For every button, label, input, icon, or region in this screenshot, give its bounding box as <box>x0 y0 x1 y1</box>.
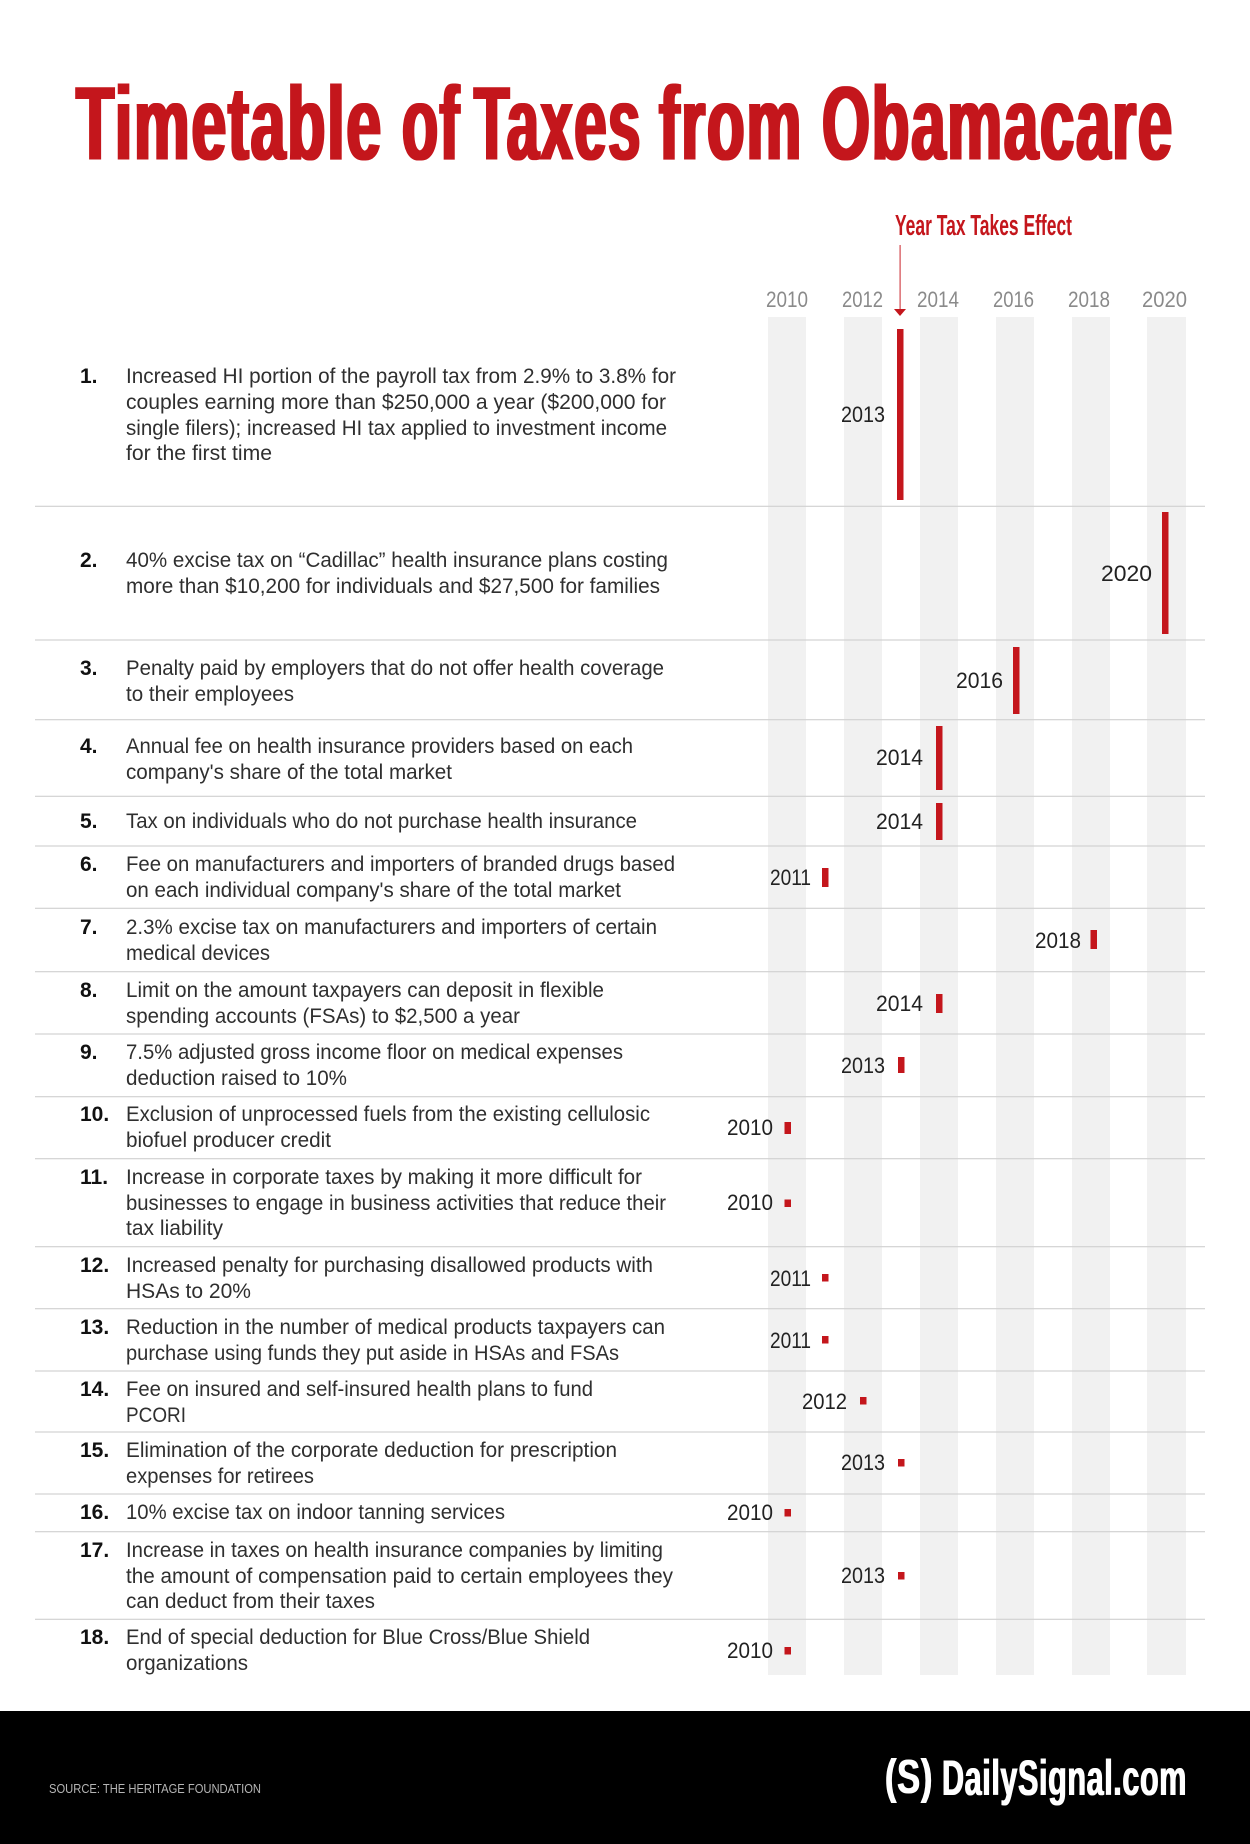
row 10: biofuel producer credit <box>126 1129 331 1152</box>
title <box>76 66 1174 182</box>
row 13: 2011 <box>770 1328 811 1353</box>
row 1: 2013 <box>841 402 885 427</box>
row 1 <box>80 329 904 500</box>
row 17: can deduct from their taxes <box>126 1590 375 1613</box>
row 11: tax liability <box>126 1217 223 1240</box>
row 17: 2013 <box>841 1563 885 1588</box>
row 16: 16. <box>80 1501 109 1524</box>
row 8 <box>80 979 942 1028</box>
title: of <box>402 66 461 182</box>
row 2: 2020 <box>1101 561 1152 586</box>
row 4 <box>80 726 942 790</box>
year axis labels <box>766 287 1187 312</box>
year axis labels: 2020 <box>1142 287 1187 312</box>
row 11: 2010 <box>727 1190 773 1215</box>
row 7: 2018 <box>1035 928 1081 953</box>
year axis labels: 2010 <box>766 287 808 312</box>
row 11: Increase in corporate taxes by making it more difficult for <box>126 1166 642 1189</box>
year axis labels: 2016 <box>993 287 1034 312</box>
row 12: HSAs to 20% <box>126 1280 251 1303</box>
row 18: End of special deduction for Blue Cross/Blue Shield <box>126 1626 590 1649</box>
row 12: 2011 <box>770 1266 811 1291</box>
row 10 <box>80 1103 791 1152</box>
row 14: 2012 <box>802 1389 847 1414</box>
row 8: 8. <box>80 979 98 1002</box>
row 3: 3. <box>80 657 98 680</box>
row 13 <box>80 1316 828 1365</box>
row 3: 2016 <box>956 668 1003 693</box>
row 9: deduction raised to 10% <box>126 1067 347 1090</box>
row 3: Penalty paid by employers that do not offer health coverage <box>126 657 664 680</box>
title: from <box>659 66 803 182</box>
footer <box>0 1711 1250 1844</box>
year axis labels: 2014 <box>917 287 959 312</box>
row 11 <box>80 1166 791 1240</box>
row 11: businesses to engage in business activities that reduce their <box>126 1192 666 1215</box>
source: SOURCE: THE HERITAGE FOUNDATION <box>49 1781 261 1796</box>
row 6: 2011 <box>770 865 811 890</box>
row 1: couples earning more than $250,000 a year ($200,000 for <box>126 391 666 414</box>
row 6: 6. <box>80 853 98 876</box>
row 18: organizations <box>126 1652 248 1675</box>
row 11: 11. <box>80 1166 108 1189</box>
row 1: Increased HI portion of the payroll tax from 2.9% to 3.8% for <box>126 365 676 388</box>
row 14: PCORI <box>126 1404 186 1427</box>
row 17: the amount of compensation paid to certain employees they <box>126 1565 673 1588</box>
row 9: 2013 <box>841 1053 885 1078</box>
row 8: Limit on the amount taxpayers can deposit in flexible <box>126 979 604 1002</box>
row 4: Annual fee on health insurance providers based on each <box>126 735 633 758</box>
row 4: company's share of the total market <box>126 761 452 784</box>
row 4: 2014 <box>876 745 923 770</box>
row 17 <box>80 1539 904 1613</box>
row 14: Fee on insured and self-insured health plans to fund <box>126 1378 593 1401</box>
row 4: 4. <box>80 735 98 758</box>
year axis labels: 2012 <box>842 287 883 312</box>
logo <box>885 1750 1187 1806</box>
row 1: 1. <box>80 365 98 388</box>
row 2: more than $10,200 for individuals and $27,500 for families <box>126 575 660 598</box>
row 16 <box>80 1500 791 1525</box>
row 8: 2014 <box>876 991 923 1016</box>
row 5: 2014 <box>876 809 923 834</box>
row 9: 9. <box>80 1041 98 1064</box>
logo: (S) <box>885 1751 933 1804</box>
row 6: Fee on manufacturers and importers of branded drugs based <box>126 853 675 876</box>
row 5: 5. <box>80 810 98 833</box>
row 5 <box>80 803 942 840</box>
row 18 <box>80 1626 791 1675</box>
row 15: 15. <box>80 1439 109 1462</box>
row 17: 17. <box>80 1539 109 1562</box>
row 1: single filers); increased HI tax applied to investment income <box>126 417 667 440</box>
row 3: to their employees <box>126 683 294 706</box>
year columns <box>768 317 1186 1675</box>
row 7: medical devices <box>126 942 270 965</box>
row 14 <box>80 1378 866 1427</box>
row 18: 2010 <box>727 1638 773 1663</box>
row 16: 10% excise tax on indoor tanning services <box>126 1501 505 1524</box>
row 13: purchase using funds they put aside in HSAs and FSAs <box>126 1342 619 1365</box>
row 5: Tax on individuals who do not purchase health insurance <box>126 810 637 833</box>
row 14: 14. <box>80 1378 109 1401</box>
row 12: Increased penalty for purchasing disallowed products with <box>126 1254 653 1277</box>
row 9 <box>80 1041 904 1090</box>
title: Timetable <box>76 66 383 182</box>
row 7 <box>80 916 1097 965</box>
row 12 <box>80 1254 828 1303</box>
row 6 <box>80 853 828 902</box>
row 15: Elimination of the corporate deduction for prescription <box>126 1439 617 1462</box>
row 10: 2010 <box>727 1115 773 1140</box>
row 2: 2. <box>80 549 98 572</box>
row 3 <box>80 647 1020 714</box>
row 18: 18. <box>80 1626 109 1649</box>
row 13: 13. <box>80 1316 109 1339</box>
row 6: on each individual company's share of the total market <box>126 879 621 902</box>
row 7: 7. <box>80 916 98 939</box>
row 7: 2.3% excise tax on manufacturers and importers of certain <box>126 916 657 939</box>
row 10: Exclusion of unprocessed fuels from the existing cellulosic <box>126 1103 650 1126</box>
row 15: expenses for retirees <box>126 1465 314 1488</box>
row 8: spending accounts (FSAs) to $2,500 a year <box>126 1005 520 1028</box>
row 1: for the first time <box>126 442 272 465</box>
row 2: 40% excise tax on “Cadillac” health insurance plans costing <box>126 549 668 572</box>
row 12: 12. <box>80 1254 109 1277</box>
row 15 <box>80 1439 904 1488</box>
row 10: 10. <box>80 1103 109 1126</box>
row 2 <box>80 512 1168 634</box>
row 13: Reduction in the number of medical products taxpayers can <box>126 1316 665 1339</box>
title: Taxes <box>474 66 642 182</box>
row 9: 7.5% adjusted gross income floor on medical expenses <box>126 1041 623 1064</box>
row 17: Increase in taxes on health insurance companies by limiting <box>126 1539 663 1562</box>
legend heading: Year Tax Takes Effect <box>895 210 1072 242</box>
row 15: 2013 <box>841 1450 885 1475</box>
row 16: 2010 <box>727 1500 773 1525</box>
row dividers <box>35 506 1205 1620</box>
arrow <box>894 245 906 316</box>
year axis labels: 2018 <box>1068 287 1110 312</box>
